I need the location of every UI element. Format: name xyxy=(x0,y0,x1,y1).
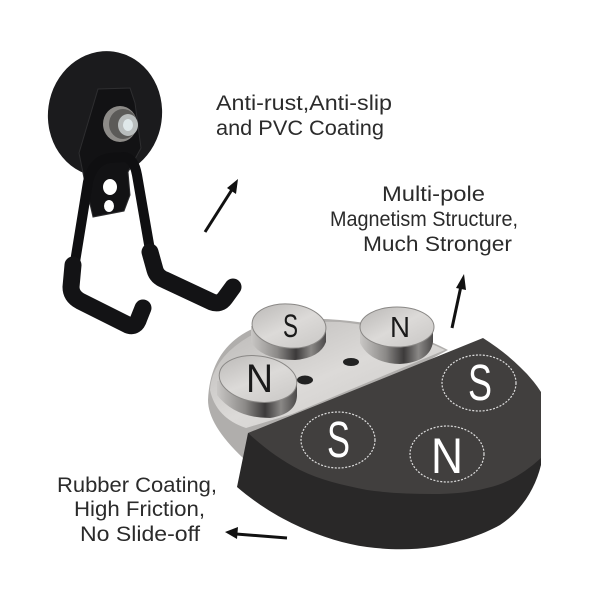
dashed circle N xyxy=(410,426,484,484)
dashed circle S right xyxy=(442,354,516,411)
icon: magnetic hook xyxy=(40,44,233,326)
magnet N top xyxy=(360,307,434,364)
bolt and nut xyxy=(103,106,138,142)
dashed circle S left xyxy=(301,411,375,468)
dashed circle N: N xyxy=(431,428,463,484)
dashed circle S left: S xyxy=(327,411,350,468)
arrow: to magnetism label xyxy=(452,274,466,328)
text: rubber coating label: Rubber Coating, xyxy=(57,474,217,497)
text: coating label: and PVC Coating xyxy=(216,117,384,140)
magnet disc xyxy=(40,44,170,184)
magnet S top xyxy=(250,301,328,360)
text: coating label: Anti-rust,Anti-slip xyxy=(216,92,392,115)
magnet N top: N xyxy=(390,312,410,344)
text: magnetism label: Magnetism Structure, xyxy=(330,208,518,231)
left rubber tip xyxy=(71,265,143,326)
magnet N left xyxy=(216,351,300,418)
text: magnetism label: Much Stronger xyxy=(363,233,512,256)
rubber top face xyxy=(248,338,541,494)
mounting plate xyxy=(79,88,141,217)
text: rubber coating label: High Friction, xyxy=(74,498,205,521)
rubber side xyxy=(237,433,541,549)
text: magnetism label xyxy=(330,183,518,256)
magnet N left: N xyxy=(246,357,273,401)
text: magnetism label: Multi-pole xyxy=(382,183,485,206)
text: coating label xyxy=(216,92,392,140)
right rubber tip xyxy=(150,252,233,303)
magnet S top: S xyxy=(283,308,298,344)
magnet assembly xyxy=(208,301,541,549)
hook frame xyxy=(75,157,150,262)
text: rubber coating label xyxy=(57,474,217,546)
arrow: to coating label xyxy=(205,179,238,232)
screw holes xyxy=(297,358,359,384)
silver base xyxy=(208,319,448,458)
plate holes xyxy=(103,179,117,212)
text: rubber coating label: No Slide-off xyxy=(80,523,200,546)
arrow: to rubber label xyxy=(225,527,287,539)
dashed circle S right: S xyxy=(468,354,492,411)
